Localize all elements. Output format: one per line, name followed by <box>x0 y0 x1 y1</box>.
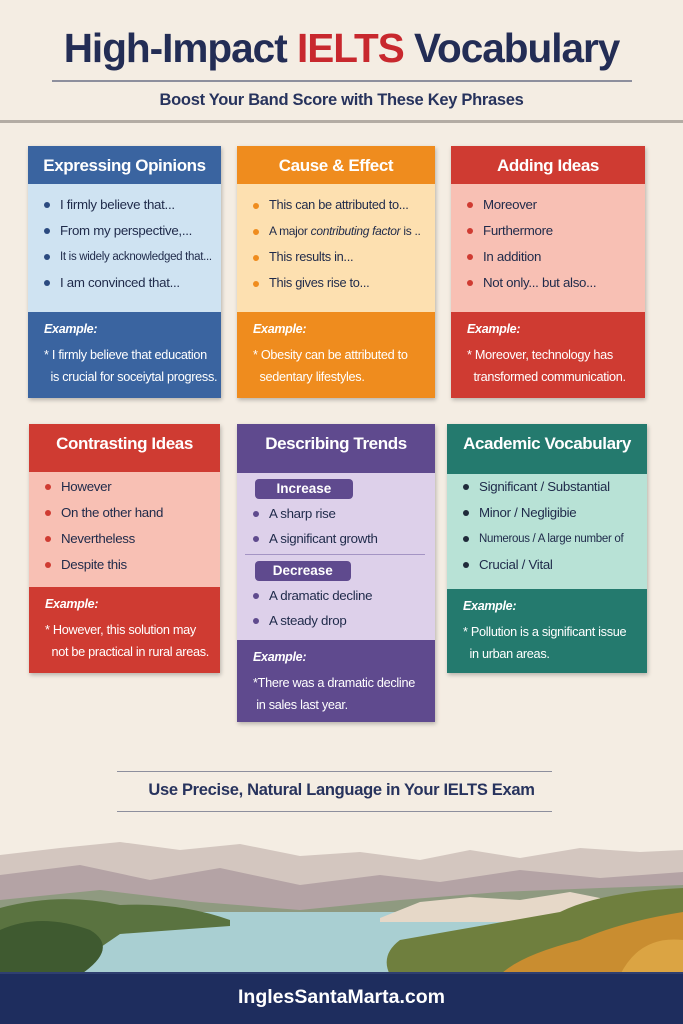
panel: academic vocabulary: Crucial / Vital <box>479 557 553 572</box>
panel: adding ideas: Not only... but also... <box>483 275 596 290</box>
panel: academic vocabulary: in urban areas. <box>469 647 550 661</box>
footer <box>0 972 683 1024</box>
panel: cause & effect: A major contributing factor is .. <box>269 224 421 238</box>
panel: cause & effect: This gives rise to... <box>269 275 369 290</box>
panel: cause & effect: sedentary lifestyles. <box>259 370 365 384</box>
panel: expressing opinions: I am convinced that... <box>60 275 180 290</box>
panel: adding ideas: Adding Ideas <box>497 156 599 175</box>
panel: expressing opinions: is crucial for soceiytal progress. <box>50 370 217 384</box>
panel: contrasting ideas <box>29 424 220 673</box>
panel: academic vocabulary: Example: <box>463 599 516 613</box>
panel: contrasting ideas: Contrasting Ideas <box>56 434 193 453</box>
tag: increase <box>255 479 353 499</box>
panel: cause & effect: Example: <box>253 322 306 336</box>
panel: cause & effect: This can be attributed to... <box>269 197 409 212</box>
tag: decrease <box>255 561 351 581</box>
panel: academic vocabulary: * Pollution is a significant issue <box>463 625 626 639</box>
subtitle: Boost Your Band Score with These Key Phrases <box>160 91 523 109</box>
panel: contrasting ideas: Example: <box>45 597 98 611</box>
title: High-Impact IELTS Vocabulary <box>64 25 619 71</box>
panel: contrasting ideas: not be practical in rural areas. <box>51 645 209 659</box>
panel: describing trends: A significant growth <box>269 531 378 546</box>
panel: adding ideas <box>451 146 645 398</box>
panel: expressing opinions: Example: <box>44 322 97 336</box>
panel: expressing opinions: I firmly believe that... <box>60 197 175 212</box>
panel: describing trends: *There was a dramatic decline <box>253 676 415 690</box>
panel: expressing opinions <box>28 146 221 398</box>
tag: decrease: Decrease <box>273 563 333 578</box>
panel: adding ideas: * Moreover, technology has <box>467 348 613 362</box>
panel: adding ideas: transformed communication. <box>473 370 626 384</box>
panel: expressing opinions: It is widely acknowledged that... <box>60 251 212 263</box>
panel: describing trends: Describing Trends <box>265 434 407 453</box>
panel: describing trends: A steady drop <box>269 613 346 628</box>
closing tagline: Use Precise, Natural Language in Your IELTS Exam <box>148 781 535 799</box>
panel: expressing opinions: From my perspective,... <box>60 223 192 238</box>
panel: academic vocabulary: Academic Vocabulary <box>463 434 631 453</box>
tag: increase: Increase <box>276 481 331 496</box>
panel: contrasting ideas: Despite this <box>61 557 127 572</box>
panel: cause & effect: Cause & Effect <box>279 156 393 175</box>
footer: InglesSantaMarta.com <box>238 986 445 1008</box>
panel: academic vocabulary <box>447 424 647 673</box>
panel: describing trends: A dramatic decline <box>269 588 372 603</box>
panel: contrasting ideas: Nevertheless <box>61 531 135 546</box>
panel: academic vocabulary: Numerous / A large number of <box>479 533 623 545</box>
panel: expressing opinions: Expressing Opinions <box>43 156 206 175</box>
panel: describing trends <box>237 424 435 722</box>
panel: contrasting ideas: * However, this solution may <box>45 623 196 637</box>
landscape illustration <box>0 842 683 972</box>
panel: adding ideas: In addition <box>483 249 541 264</box>
panel: cause & effect: * Obesity can be attributed to <box>253 348 408 362</box>
panel: cause & effect: This results in... <box>269 249 353 264</box>
panel: academic vocabulary: Minor / Negligibie <box>479 505 576 520</box>
panel: expressing opinions: * I firmly believe that education <box>44 348 207 362</box>
panel: describing trends: A sharp rise <box>269 506 336 521</box>
panel: cause & effect <box>237 146 435 398</box>
panel: academic vocabulary: Significant / Substantial <box>479 479 610 494</box>
panel: describing trends: Example: <box>253 650 306 664</box>
panel: describing trends: in sales last year. <box>256 698 348 712</box>
panel: adding ideas: Furthermore <box>483 223 553 238</box>
panel: contrasting ideas: However <box>61 479 111 494</box>
panel: adding ideas: Example: <box>467 322 520 336</box>
panel: contrasting ideas: On the other hand <box>61 505 163 520</box>
panel: adding ideas: Moreover <box>483 197 537 212</box>
